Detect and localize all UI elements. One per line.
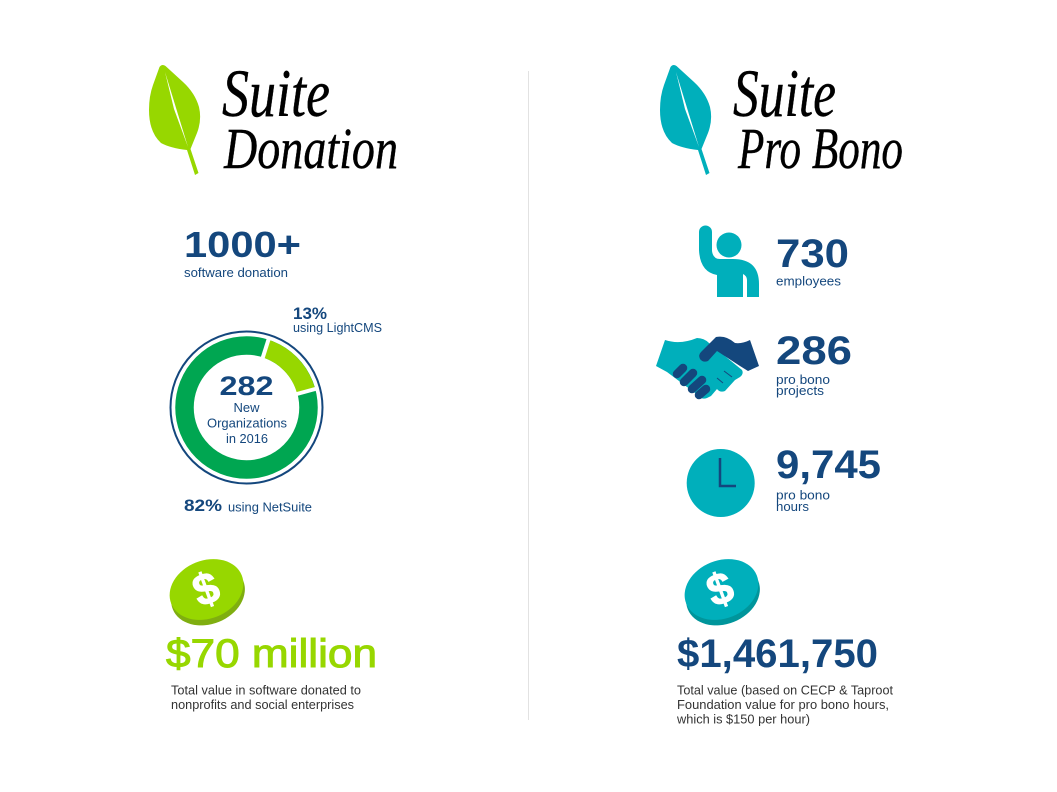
callout: 82% using NetSuite: 82% [184, 496, 222, 515]
stat: 286 pro bono projects [776, 329, 852, 398]
text: pro bono total value [676, 684, 894, 726]
callout: 82% using NetSuite: using NetSuite [228, 500, 312, 514]
donut chart: new organizations: 282 [220, 371, 274, 401]
icon: green dollar coin: $ [186, 562, 226, 617]
stat: 286 pro bono projects: 286 [776, 329, 852, 373]
icon: clock [687, 449, 755, 517]
stat: 9,745 pro bono hours: pro bono [776, 488, 830, 502]
callout: 13% using LightCMS [293, 305, 382, 335]
icon: handshake [656, 337, 759, 399]
donut chart: new organizations: in 2016 [226, 432, 268, 446]
stat: $1,461,750: $1,461,750 [677, 632, 878, 676]
stat: 9,745 pro bono hours: 9,745 [776, 443, 881, 487]
text: pro bono total value: Foundation value for pro bono hours, [677, 698, 889, 712]
donut chart: new organizations: New [234, 401, 261, 415]
heading: Suite Pro Bono: Pro Bono [737, 116, 903, 181]
icon: teal dollar coin: $ [700, 562, 740, 617]
icon: green leaf [149, 65, 200, 175]
stat: 9,745 pro bono hours [776, 443, 881, 514]
donut chart: new organizations [170, 332, 322, 484]
heading: Suite Donation: Suite [222, 55, 330, 131]
icon: teal leaf [660, 65, 711, 175]
stat: 1000+ software donation: 1000+ [184, 224, 301, 265]
stat: 286 pro bono projects: projects [776, 384, 824, 398]
donut chart: new organizations: Organizations [207, 416, 287, 430]
heading: Suite Pro Bono [733, 55, 903, 181]
stat: 1000+ software donation: software donation [184, 266, 288, 280]
icon: person raising hand [699, 226, 759, 297]
stat: 9,745 pro bono hours: hours [776, 500, 809, 514]
callout: 13% using LightCMS: 13% [293, 305, 327, 323]
icon: green dollar coin [160, 548, 254, 636]
text: pro bono total value: which is $150 per hour) [676, 712, 810, 726]
stat: 730 employees: 730 [776, 232, 849, 276]
icon: teal dollar coin [675, 548, 769, 636]
callout: 13% using LightCMS: using LightCMS [293, 321, 382, 335]
text: donation total value: Total value in software donated to [171, 684, 361, 698]
stat: $70 million: $70 million [166, 632, 377, 676]
heading: Suite Donation: Donation [223, 116, 398, 181]
callout: 82% using NetSuite [184, 496, 312, 515]
text: donation total value [171, 684, 361, 712]
text: pro bono total value: Total value (based on CECP & Taproot [677, 684, 894, 698]
stat: 1000+ software donation [184, 224, 301, 280]
stat: 286 pro bono projects: pro bono [776, 373, 830, 387]
text: donation total value: nonprofits and social enterprises [171, 698, 354, 712]
heading: Suite Pro Bono: Suite [733, 55, 836, 131]
heading: Suite Donation [222, 55, 398, 181]
stat: 730 employees: employees [776, 274, 841, 288]
